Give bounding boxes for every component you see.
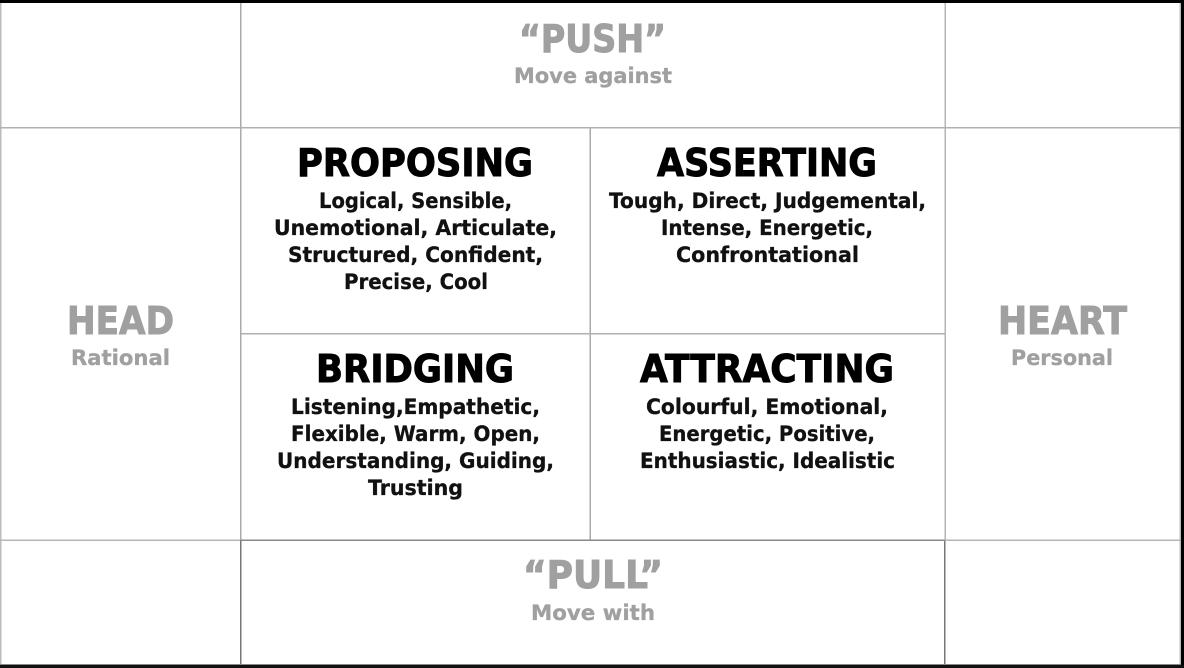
panel: attracting — [640, 347, 895, 473]
panel: bridging — [277, 347, 554, 500]
panel: bridging: BRIDGING — [316, 347, 514, 391]
panel: proposing: Unemotional, Articulate, — [274, 216, 557, 240]
panel: asserting: Intense, Energetic, — [661, 216, 873, 240]
panel: push: “PUSH” — [519, 17, 666, 61]
panel: push — [514, 17, 672, 88]
panel: heart: HEART — [998, 299, 1127, 343]
panel: heart: Personal — [1011, 346, 1113, 370]
panel: proposing: Logical, Sensible, — [319, 189, 512, 213]
panel: proposing: Structured, Confident, — [288, 243, 543, 267]
panel: attracting: Energetic, Positive, — [659, 422, 875, 446]
panel: pull: Move with — [531, 601, 655, 625]
panel: attracting: Colourful, Emotional, — [646, 395, 888, 419]
panel: asserting: ASSERTING — [657, 141, 877, 185]
panel: attracting: Enthusiastic, Idealistic — [640, 449, 895, 473]
panel: heart — [998, 299, 1127, 370]
panel: head: HEAD — [67, 299, 174, 343]
panel: bridging: Flexible, Warm, Open, — [291, 422, 540, 446]
panel: head — [67, 299, 174, 370]
panel: head: Rational — [71, 346, 170, 370]
panel: push: Move against — [514, 64, 672, 88]
panel: proposing — [274, 141, 557, 294]
panel: bridging: Understanding, Guiding, — [277, 449, 554, 473]
panel: bridging: Listening,Empathetic, — [291, 395, 540, 419]
panel: attracting: ATTRACTING — [640, 347, 894, 391]
panel: pull — [523, 553, 663, 625]
panel: asserting — [609, 141, 926, 267]
panel: pull: “PULL” — [523, 553, 663, 597]
panel: asserting: Tough, Direct, Judgemental, — [609, 189, 926, 213]
panel: proposing: Precise, Cool — [344, 270, 488, 294]
panel: asserting: Confrontational — [676, 243, 859, 267]
panel: proposing: PROPOSING — [297, 141, 533, 185]
panel: bridging: Trusting — [368, 476, 463, 500]
